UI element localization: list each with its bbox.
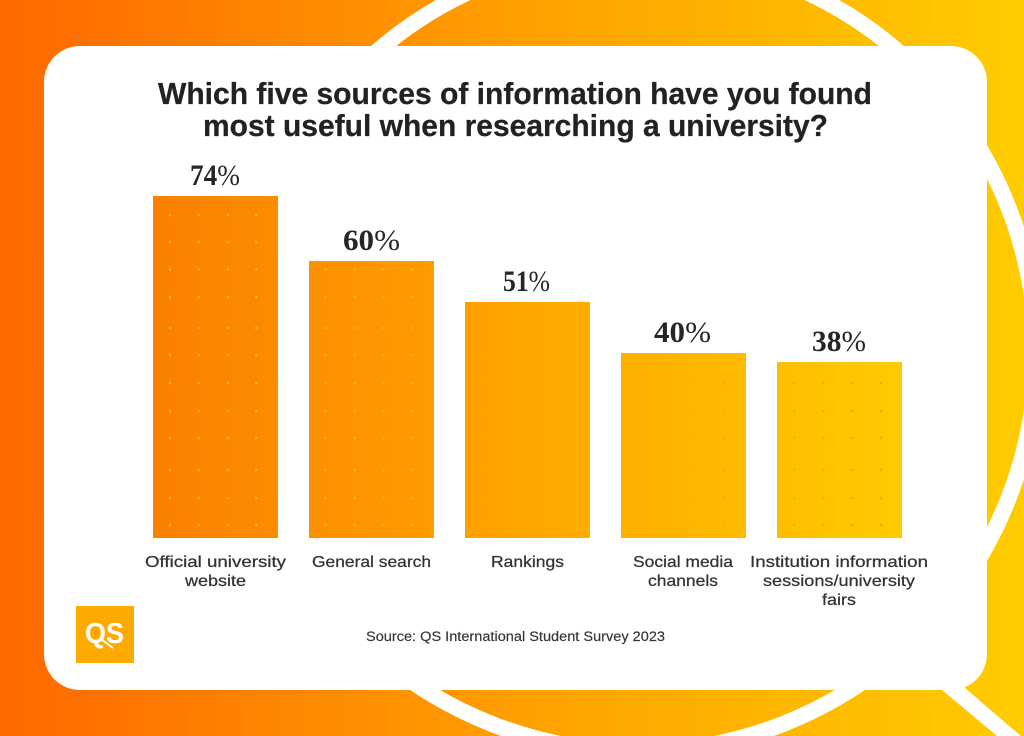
label: institution information sessions: [750, 554, 928, 609]
label: institution information sessions: Institution information: [750, 554, 928, 571]
title: Which five sources of information have you found: [158, 76, 872, 111]
title: most useful when researching a university?: [203, 108, 828, 143]
bar: official university website 74%: [153, 159, 278, 538]
bar: social media channels 40%: [621, 316, 746, 538]
source note: Source: QS International Student Survey 2023: [366, 629, 665, 644]
bar chart: [153, 159, 902, 538]
label: institution information sessions: fairs: [822, 592, 856, 609]
label: official university website: Official university: [145, 554, 286, 571]
label: social media channels: Social media: [633, 554, 733, 571]
bar: rankings 51%: 51%: [503, 265, 550, 298]
label: social media channels: channels: [648, 573, 718, 590]
bar: general search 60%: 60%: [343, 224, 400, 257]
icon: QS logo: [76, 606, 134, 663]
label: official university website: website: [184, 573, 246, 590]
bar: institution information sessions 38%: 38%: [812, 325, 866, 358]
label: institution information sessions: sessions/university: [763, 573, 915, 590]
icon: QS logo: QS: [85, 618, 124, 650]
bar: general search 60%: [309, 224, 434, 538]
label: social media channels: [633, 554, 733, 590]
label: general search: General search: [312, 554, 431, 571]
bar: official university website 74%: 74%: [190, 159, 240, 192]
label: official university website: [145, 554, 286, 590]
magnifier ring: [239, 0, 1024, 736]
bar: social media channels 40%: 40%: [654, 316, 711, 349]
bar: rankings 51%: [465, 265, 590, 538]
label: rankings: Rankings: [491, 554, 564, 571]
bar labels: [145, 554, 928, 609]
title: [158, 76, 872, 143]
bar: institution information sessions 38%: [777, 325, 902, 538]
magnifier handle: [935, 682, 1021, 736]
